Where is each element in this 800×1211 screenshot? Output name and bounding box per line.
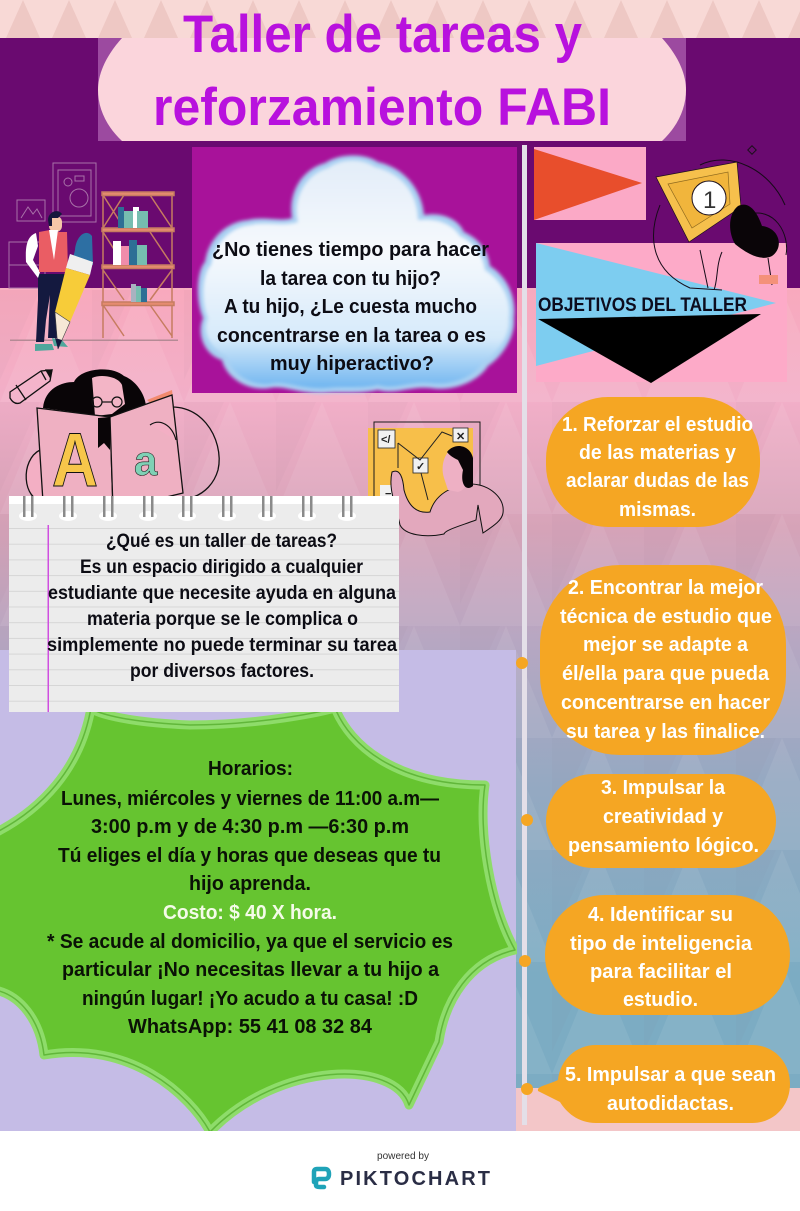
objective 4: 4. Identificar su (588, 904, 733, 926)
illustration: woman with medal: 1 (703, 187, 716, 214)
cloud text: ¿No tienes tiempo para hacer (212, 239, 489, 261)
man (36, 274, 67, 342)
schedule text: particular ¡No necesitas llevar a tu hijo a (62, 959, 440, 981)
pencil icon (10, 370, 52, 403)
objective 2: él/ella para que pueda (562, 663, 770, 685)
schedule text: WhatsApp: 55 41 08 32 84 (128, 1016, 373, 1038)
cloud text: la tarea con tu hijo? (260, 268, 441, 290)
schedule text: Lunes, miércoles y viernes de 11:00 a.m— (61, 788, 439, 810)
illustration: man with giant pencil and bookshelf (9, 163, 178, 351)
notebook text: materia porque se le complica o (87, 609, 358, 630)
title banner (98, 38, 686, 141)
schedule text: * Se acude al domicilio, ya que el servicio es (47, 931, 453, 953)
objective 3 (546, 774, 776, 868)
objective 1: de las materias y (579, 442, 737, 464)
objective 4: para facilitar el (590, 961, 732, 983)
objective 2: concentrarse en hacer (561, 692, 770, 714)
schedule text: Costo: $ 40 X hora. (163, 902, 337, 924)
notebook text: simplemente no puede terminar su tarea (47, 635, 397, 656)
cloud text (212, 239, 489, 375)
cloud text: muy hiperactivo? (270, 353, 434, 375)
cloud text: concentrarse en la tarea o es (217, 325, 486, 347)
schedule text: Tú eliges el día y horas que deseas que tu (58, 845, 441, 867)
shelf (102, 192, 174, 338)
objective 2: mejor se adapte a (583, 634, 749, 656)
objectives heading text: OBJETIVOS DEL TALLER (538, 294, 747, 316)
schedule text: 3:00 p.m y de 4:30 p.m —6:30 p.m (91, 816, 409, 838)
illustration: woman at task board: </ (381, 434, 390, 446)
objective 1: 1. Reforzar el estudio (562, 414, 753, 436)
panel: notebook what is a homework workshop (9, 496, 399, 712)
timeline dots (516, 657, 533, 1095)
objective 2: 2. Encontrar la mejor (568, 577, 763, 599)
objective 1: mismas. (619, 499, 696, 521)
cloud text: A tu hijo, ¿Le cuesta mucho (224, 296, 477, 318)
schedule text: Horarios: (208, 758, 293, 780)
objective 4: tipo de inteligencia (570, 933, 753, 955)
objective 4: estudio. (623, 989, 698, 1011)
objective 2: técnica de estudio que (560, 606, 772, 628)
title (153, 5, 611, 137)
panel: red triangle flag (534, 147, 646, 220)
icon: Piktochart logo (314, 1169, 329, 1187)
illustration: woman reading book (10, 369, 219, 510)
notebook text: ¿Qué es un taller de tareas? (106, 531, 337, 552)
footer: powered by Piktochart: powered by (377, 1151, 429, 1162)
floor line (10, 340, 178, 341)
illustration: woman at task board: = (385, 490, 391, 502)
cloud (198, 155, 514, 393)
illustration: woman at task board (368, 422, 503, 536)
notebook spiral rings (19, 496, 356, 521)
panel: objectives heading (536, 243, 787, 383)
notebook text (47, 531, 397, 682)
schedule text: ningún lugar! ¡Yo acudo a tu casa! :D (82, 988, 418, 1010)
objective 2 (540, 565, 786, 755)
objective 3: 3. Impulsar la (601, 777, 726, 799)
letter a: a (134, 437, 158, 484)
title: reforzamiento FABI (153, 78, 611, 137)
notebook text: Es un espacio dirigido a cualquier (80, 557, 364, 578)
objective 3: pensamiento lógico. (568, 835, 759, 857)
objective 1: aclarar dudas de las (566, 470, 749, 492)
footer: powered by Piktochart: PIKTOCHART (340, 1168, 490, 1190)
notebook text: estudiante que necesite ayuda en alguna (48, 583, 396, 604)
objective 4 (545, 895, 790, 1015)
timeline vertical line (522, 145, 527, 1125)
schedule text: hijo aprenda. (189, 873, 311, 895)
letter A: A (52, 418, 98, 503)
objective 2: su tarea y las finalice. (566, 721, 765, 743)
illustration: woman with medal (654, 146, 787, 290)
objective 5: autodidactas. (607, 1093, 734, 1115)
schedule text (47, 758, 453, 1038)
objective 1 (546, 397, 760, 527)
illustration: woman at task board: ✕ (456, 431, 465, 443)
footer: powered by Piktochart (314, 1151, 490, 1190)
objective 5: 5. Impulsar a que sean (565, 1064, 776, 1086)
objective 5 (538, 1045, 790, 1123)
pencil (72, 233, 93, 265)
illustration: woman at task board: ✓ (416, 461, 425, 473)
title: Taller de tareas y (183, 5, 582, 64)
objective 3: creatividad y (603, 806, 724, 828)
panel: green star schedule (0, 708, 515, 1132)
notebook text: por diversos factores. (130, 661, 314, 682)
panel: cloud question (192, 147, 517, 393)
